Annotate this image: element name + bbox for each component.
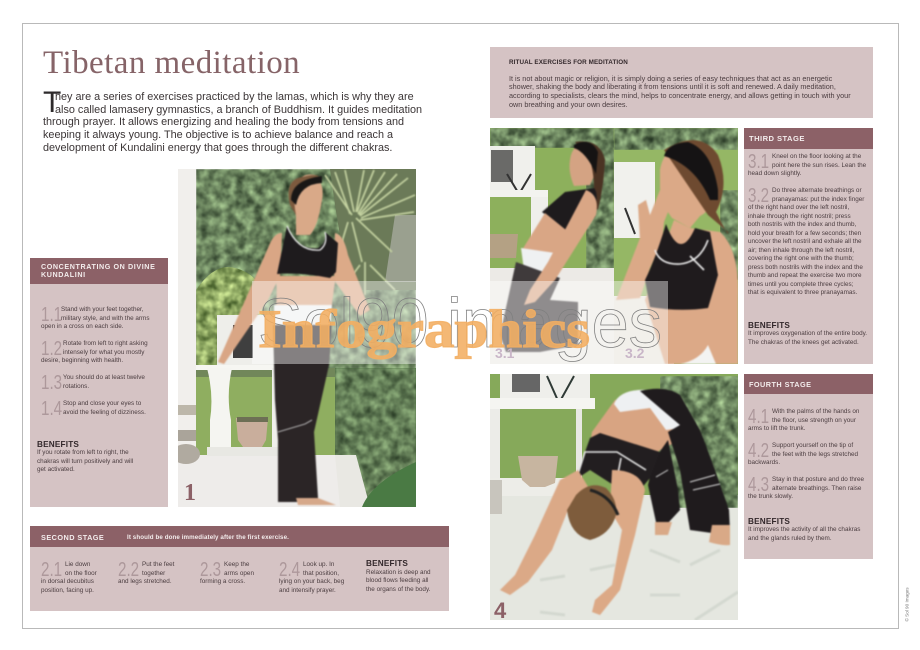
benefits: The chakras of the knees get activated. (748, 338, 859, 346)
step 4.1 (748, 406, 859, 432)
panel: second stage (30, 526, 449, 611)
intro text: through prayer. It allows energizing and healing the body from tensions and (43, 116, 404, 128)
step 2.3: 2.3 (200, 559, 221, 581)
benefits: the organs of the body. (366, 586, 430, 593)
benefits: blood flows feeding all (366, 577, 428, 584)
panel text: own breathing and your own desires. (509, 100, 628, 109)
step 1.1: open in a cross on each side. (41, 323, 124, 330)
step 3.2: inhale through the right nostril; press (748, 212, 851, 220)
benefits: BENEFITS (748, 517, 790, 526)
step 1.4 (41, 398, 146, 420)
step 4.3: 4.3 (748, 474, 769, 496)
intro text: also called lamasery gymnastics, a branch of Buddhism. It guides meditation (55, 104, 422, 116)
step 2.3: arms open (224, 570, 254, 576)
step 4.3 (748, 474, 864, 500)
step 3.2: press both nostrils with the index and the (748, 264, 863, 270)
photo 3.1: kneeling pose (490, 128, 614, 364)
step 3.2: hold your breath for a few seconds; then (748, 230, 861, 236)
step 4.1: arms to lift the trunk. (748, 425, 805, 432)
photos (178, 128, 738, 620)
benefits: If you rotate from left to right, the (37, 449, 129, 456)
benefits: BENEFITS (366, 559, 408, 568)
step 2.1: on the floor (65, 570, 97, 576)
step 4.3: Stay in that posture and do three (772, 476, 864, 483)
panel heading: SECOND STAGE (41, 533, 104, 542)
step 1.4: Stop and close your eyes to (63, 400, 141, 407)
step 2.3 (200, 559, 254, 585)
panel: concentrating on divine kundalini (30, 258, 168, 507)
photo number 4: 4 (494, 598, 507, 623)
step 1.1: military style, and with the arms (61, 314, 150, 322)
step 3.2: thumb and repeat the exercise two more (748, 272, 862, 279)
step 3.2: air; then inhale through the left nostril, (748, 246, 854, 254)
step 1.3: You should do at least twelve (63, 374, 145, 381)
step 2.4: lying on your back, beg (279, 578, 344, 585)
intro text: hey are a series of exercises practiced by the lamas, which is why they are (55, 91, 414, 103)
benefits: chakras will turn positively and will (37, 458, 133, 464)
step 2.3: Keep the (224, 561, 249, 568)
photo 4: downward-facing pose (490, 374, 738, 623)
watermark: 3.1 (495, 345, 515, 361)
step 1.4: 1.4 (41, 398, 62, 420)
step 3.2 (748, 185, 864, 296)
watermark: Infographics (258, 299, 590, 359)
step 3.2: uncover the left nostril and exhale all the (748, 238, 862, 245)
step 2.4 (279, 559, 344, 594)
step 3.2: covering the right one with the thumb; (748, 255, 854, 262)
step 4.2: backwards. (748, 459, 780, 466)
step 1.3: rotations. (63, 382, 89, 390)
step 1.2: intensely for what you mostly (63, 348, 144, 356)
drop cap: T (43, 86, 61, 118)
step 4.1: With the palms of the hands on (772, 408, 859, 415)
step 3.2: pranayamas: put the index finger (772, 196, 864, 202)
intro text (43, 86, 422, 154)
step 1.2: Rotate from left to right asking (63, 340, 148, 347)
benefits: It improves the activity of all the chakras (748, 526, 860, 533)
step 3.2: 3.2 (748, 185, 769, 207)
step 1.4: avoid the feeling of dizziness. (63, 408, 146, 416)
step 2.1 (41, 559, 97, 594)
panel heading: KUNDALINI (41, 271, 86, 279)
panel heading (30, 526, 449, 547)
panel heading: THIRD STAGE (749, 134, 805, 143)
step 3.2: times until you complete three cycles; (748, 280, 853, 288)
panel: ritual exercises (490, 47, 873, 118)
benefits (366, 559, 431, 593)
step 4.2: Support yourself on the tip of (772, 442, 853, 449)
benefits: Relaxation is deep and (366, 569, 431, 576)
step 3.2: Do three alternate breathings or (772, 187, 862, 194)
panel: fourth stage (744, 374, 873, 559)
step 3.2: of the right hand over the left nostril, (748, 204, 849, 211)
benefits: and the glands ruled by them. (748, 534, 832, 542)
step 2.1: Lie down (65, 561, 90, 568)
panel heading: FOURTH STAGE (749, 380, 811, 389)
step 2.2: and legs stretched. (118, 578, 172, 585)
copyright: © Sol 90 Images (904, 587, 910, 622)
step 2.2: together (142, 570, 165, 576)
benefits (37, 440, 133, 473)
panel text: It is not about magic or religion, it is simply doing a series of easy techniques that act as an energetic (509, 74, 832, 82)
photo 3.2: alternate breathing (614, 128, 738, 364)
step 4.3: the trunk slowly. (748, 493, 793, 500)
step 2.4: and intensify prayer. (279, 586, 336, 594)
step 2.1: in dorsal decubitus (41, 578, 94, 585)
benefits (748, 517, 860, 542)
step 2.1: position, facing up. (41, 586, 94, 594)
benefits: BENEFITS (748, 321, 790, 330)
step 1.2 (41, 338, 148, 364)
step 1.1: Stand with your feet together, (61, 306, 144, 313)
step 4.2 (748, 440, 858, 466)
step 2.4: Look up. In (303, 561, 334, 568)
step 4.1: the floor, use strength on your (772, 416, 856, 424)
step 2.4: 2.4 (279, 559, 300, 581)
intro text: development of Kundalini energy that goes through the different chakras. (43, 142, 392, 154)
step 3.1: 3.1 (748, 151, 769, 173)
panel heading: RITUAL EXERCISES FOR MEDITATION (509, 59, 628, 66)
panel text: according to specialists, clears the mind, helps to concentrate energy, and allows getting in touch with your (509, 91, 851, 100)
step 2.1: 2.1 (41, 559, 62, 581)
step 3.1 (748, 151, 866, 177)
step 1.1 (41, 304, 150, 330)
panel heading: It should be done immediately after the first exercise. (127, 534, 289, 541)
panel heading (30, 258, 168, 284)
step 4.1: 4.1 (748, 406, 769, 428)
panel heading (744, 374, 873, 394)
step 2.2: 2.2 (118, 559, 139, 581)
benefits (748, 321, 867, 346)
photo 1: standing pose (172, 169, 416, 507)
panel heading (744, 128, 873, 149)
step 3.1: Kneel on the floor looking at the (772, 153, 861, 160)
step 1.3 (41, 372, 145, 394)
benefits: get activated. (37, 466, 75, 473)
panel text: shower, shaking the body and liberating it from tensions until it is soft and renewed. A daily meditation, (509, 82, 836, 91)
step 3.1: head down slightly. (748, 170, 802, 177)
step 1.2: 1.2 (41, 338, 62, 360)
step 1.2: desire, beginning with health. (41, 357, 123, 364)
benefits: BENEFITS (37, 440, 79, 449)
step 4.2: the feet with the legs stretched (772, 450, 858, 458)
intro text: keeping it always young. The objective is to achieve balance and reach a (43, 129, 393, 141)
step 3.1: point here the sun rises. Lean the (772, 162, 866, 168)
step 2.3: forming a cross. (200, 578, 245, 585)
watermark: 3.2 (625, 345, 645, 361)
photo number 1: 1 (184, 480, 196, 506)
panel heading: CONCENTRATING ON DIVINE (41, 263, 155, 271)
step 4.3: alternate breathings. Then raise (772, 484, 861, 492)
panel: third stage (744, 128, 873, 364)
step 3.2: both nostrils with the index and thumb, (748, 221, 856, 228)
benefits: It improves oxygenation of the entire body. (748, 330, 867, 337)
title: Tibetan meditation (43, 45, 300, 81)
step 1.1: 1.1 (41, 304, 62, 326)
step 3.2: that is equivalent to three pranayamas. (748, 289, 857, 296)
step 1.3: 1.3 (41, 372, 62, 394)
panel text (509, 74, 851, 109)
step 2.4: that position, (303, 570, 339, 576)
step 4.2: 4.2 (748, 440, 769, 462)
watermark: Sol90 images (258, 284, 662, 362)
step 2.2: Put the feet (142, 561, 174, 568)
step 2.2 (118, 559, 174, 585)
